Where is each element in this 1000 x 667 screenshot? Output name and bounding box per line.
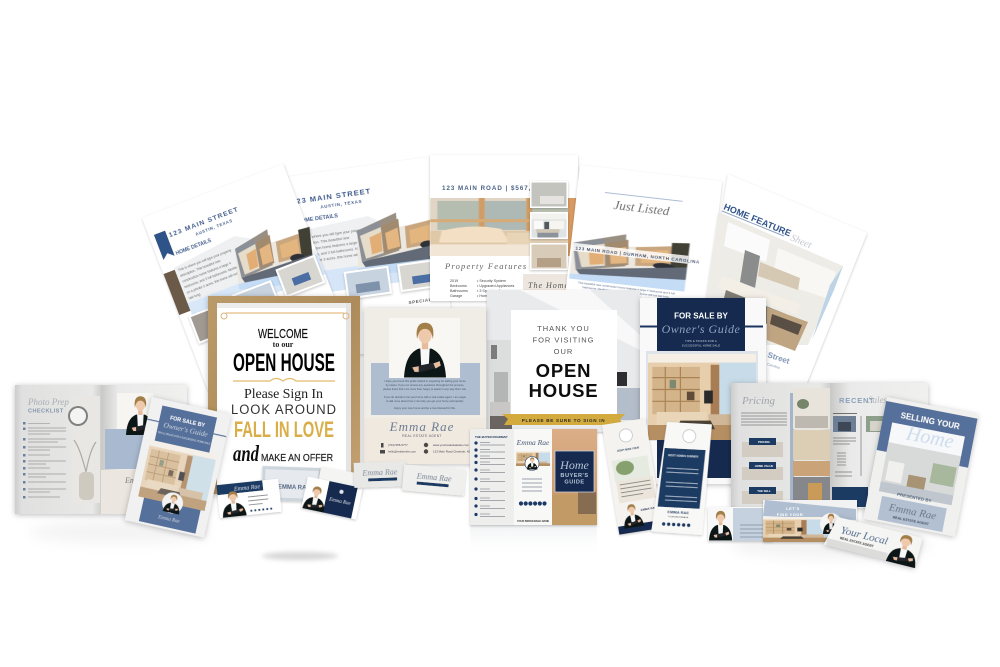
- floor shadow: right kit: [730, 531, 930, 559]
- selling your home booklet: [863, 397, 978, 536]
- card: agent contact: [708, 507, 773, 541]
- feature list left: Bathrooms: [450, 289, 468, 293]
- poster: thank you for visiting: [487, 290, 640, 432]
- cover photo: [552, 429, 597, 525]
- name: EMMA RAE: [640, 505, 657, 512]
- welcome: WELCOME: [258, 326, 308, 341]
- city label: Carolina: [767, 362, 780, 370]
- panel text: [665, 468, 699, 502]
- door hanger: right: [651, 421, 712, 535]
- agent circle: [820, 513, 842, 535]
- thank you: OUR: [554, 347, 573, 356]
- blue text panel: [371, 363, 480, 415]
- kitchen photo: [700, 212, 843, 345]
- photo: [763, 517, 829, 542]
- letter text: by owner. If you run across any questions throughout the process,: [386, 383, 464, 387]
- card: navy agent card: Emma Rae: [328, 497, 352, 507]
- thumbnails: [184, 255, 330, 344]
- portrait: [709, 511, 732, 540]
- card: your local real estate agent: [824, 515, 922, 568]
- business cards: left group: [216, 466, 363, 519]
- room photo: [646, 351, 758, 441]
- card: agent contact: Emma Rae: [233, 484, 261, 493]
- sold photos: [833, 416, 887, 432]
- pricing tiles: HOME VALUE: [755, 464, 773, 468]
- agent portrait: [163, 493, 183, 515]
- dining photo: [767, 307, 808, 351]
- agent portrait: [404, 323, 446, 378]
- buyer's guide reflection: [470, 525, 597, 557]
- card: gray logo card: EMMA RAE: [278, 485, 310, 492]
- feature list left: Garage: [450, 294, 462, 298]
- buyer's guide: [560, 473, 589, 486]
- title: FOR SALE BY: [169, 415, 206, 429]
- buyer's guide: BUYER'S: [560, 473, 589, 479]
- thumbnail photos: [344, 258, 446, 300]
- rule: [640, 326, 763, 328]
- fall in love: FALL IN LOVE: [234, 417, 334, 442]
- subtitle: AUSTIN, TEXAS: [195, 218, 233, 237]
- text box: [616, 476, 656, 503]
- footer: [618, 520, 663, 535]
- feature list right: • Upgraded Appliances: [477, 284, 515, 288]
- social icons: [519, 501, 547, 506]
- lower panel: [139, 498, 201, 534]
- contact details: [388, 443, 471, 454]
- pale wash: [171, 211, 325, 324]
- flyer: home feature sheet: [695, 174, 867, 385]
- hook: [618, 428, 633, 443]
- card: script left: Emma Rae: [361, 467, 398, 478]
- letter text: to talk more about how I can help you get your home sold quickly.: [386, 399, 464, 403]
- description: last long.: [188, 292, 202, 300]
- open house: HOUSE: [529, 380, 598, 401]
- contact icons: [380, 443, 428, 454]
- special features: SPECIAL: [408, 297, 432, 305]
- agent photo box: [389, 318, 460, 378]
- card: back white: [317, 467, 362, 496]
- thank you: THANK YOU: [537, 324, 590, 333]
- agent portrait: [621, 503, 644, 529]
- buyer's guide trifold: [470, 429, 597, 525]
- heading: LET'S: [786, 506, 800, 511]
- title: 123 MAIN STREET: [168, 206, 240, 239]
- feature list right: • Security System: [477, 279, 506, 283]
- checklist open book: [15, 385, 187, 514]
- feature list right: [477, 279, 515, 298]
- name: Emma Rae: [887, 501, 937, 522]
- description: on a private 3 acres, this home will not: [304, 252, 365, 264]
- pricing text: [741, 413, 787, 425]
- for sale by owner booklet front (left): [125, 397, 231, 538]
- roadmap title: THE BUYER ROADMAP: [475, 435, 508, 439]
- tagline: [682, 339, 720, 348]
- for sale by owner guide: [640, 298, 766, 484]
- wood frame: [208, 296, 360, 494]
- name: EMMA RAE: [667, 509, 690, 515]
- checklist heading: CHECKLIST: [28, 408, 64, 414]
- home details heading: HOME DETAILS: [297, 213, 339, 225]
- ornament rule: [233, 378, 335, 381]
- card: agent contact: [216, 479, 282, 518]
- description: This is where you will type your property: [300, 228, 364, 241]
- house photo: [233, 225, 315, 290]
- gold ribbon: [502, 414, 625, 425]
- navy panel: [658, 448, 706, 509]
- property photo: [568, 234, 691, 292]
- feature list left: [450, 279, 468, 298]
- description: [178, 248, 243, 300]
- address text: 123 MAIN ROAD | DURHAM, NORTH CAROLINA: [575, 246, 700, 265]
- tagline: TIPS & TRICKS FOR A: [685, 339, 717, 343]
- navy header: [657, 298, 745, 354]
- description: construction home features a large 4: [302, 240, 360, 252]
- feature list left: Bedrooms: [450, 284, 467, 288]
- and script: and: [233, 441, 259, 466]
- contact details: hello@realtorsite.com: [388, 450, 417, 454]
- letter text: If you do decide to list your home with a real estate agent, I am eager: [384, 395, 466, 399]
- pricing tiles: [742, 438, 783, 504]
- portrait: [823, 514, 839, 534]
- brokerage: YOUR BROKERAGE NAME: [517, 520, 549, 523]
- home details heading: HOME DETAILS: [175, 238, 213, 257]
- header: [155, 405, 217, 453]
- sales script: Sales: [868, 395, 887, 405]
- open house: [529, 360, 598, 401]
- feature list right: • 3 Spacious Areas: [477, 289, 508, 293]
- description: This beautiful new construction home features a large 4 bedrooms and 3 full: [578, 281, 675, 296]
- the home box: [523, 274, 575, 298]
- header: [877, 401, 978, 468]
- flyer: 123 Main Road listing: [430, 155, 578, 301]
- card: navy agent card: [301, 477, 363, 519]
- description: on a private 3 acres, this home will not: [186, 272, 238, 295]
- description: last long.: [304, 264, 319, 270]
- floor shadow: left booklet: [30, 520, 210, 544]
- script: Owner's Guide: [662, 322, 741, 336]
- contact: [522, 479, 542, 491]
- hero photo: [429, 198, 568, 256]
- the home label: The Home: [528, 281, 569, 290]
- right page signature: Emma: [124, 476, 145, 485]
- room photo: [879, 442, 961, 505]
- letter text: please know that I am more than happy to assist in any way that I can.: [383, 387, 467, 391]
- left panel: [470, 429, 514, 525]
- navy footer: [832, 487, 868, 507]
- side rules: [147, 418, 159, 422]
- please sign in: Please Sign In: [244, 387, 323, 402]
- lower band: [826, 538, 888, 560]
- agent circle: [525, 456, 539, 470]
- right page photo and panel: [117, 393, 153, 431]
- mini photo: [516, 451, 550, 466]
- role: REAL ESTATE AGENT: [892, 515, 930, 526]
- agent portrait: [126, 396, 155, 435]
- white inner panel: [884, 422, 965, 478]
- pricing script: Pricing: [741, 395, 775, 407]
- navy cover box: [555, 451, 594, 492]
- title: 123 MAIN STREET: [291, 186, 372, 206]
- heading: DON'T MISS YOUR: [617, 446, 640, 453]
- look around: LOOK AROUND: [231, 402, 337, 417]
- plant photo: [612, 455, 651, 483]
- letter text: [383, 379, 467, 410]
- description: [300, 228, 369, 270]
- contact details: (704) 555-5777: [388, 443, 408, 447]
- heading line 2: FIND YOUR: [777, 512, 803, 517]
- title: FOR SALE BY: [674, 312, 729, 320]
- dark side photo: [164, 270, 190, 315]
- flyer: 123 Main Street (front copy): [142, 163, 352, 392]
- sold details: [833, 416, 861, 476]
- make an offer: MAKE AN OFFER: [261, 452, 333, 464]
- checklist items: [23, 422, 26, 498]
- script: Your Local: [839, 524, 889, 548]
- left page: [15, 385, 101, 514]
- white card: [511, 310, 617, 415]
- flyer: just listed: [566, 165, 722, 308]
- contact lines: [740, 525, 770, 537]
- description: bedrooms, and 3 full bathrooms. Nestled: [303, 245, 367, 258]
- thank you: [532, 324, 595, 356]
- tagline: SUCCESSFUL HOME SALE: [682, 344, 720, 348]
- blue strip: [188, 254, 325, 324]
- title: HOME FEATURE: [722, 202, 793, 238]
- agent portrait: [527, 457, 537, 470]
- letter text: I hope you found this guide helpful in preparing for selling your home: [384, 379, 466, 383]
- presented by: PRESENTED BY: [897, 492, 932, 503]
- description: description. This beautiful new: [180, 259, 222, 278]
- social icons: [662, 522, 690, 527]
- title: SELLING YOUR: [900, 411, 961, 431]
- description: description. This beautiful new: [301, 236, 350, 247]
- house photo: [356, 211, 447, 274]
- to our: to our: [273, 340, 294, 349]
- agent name: Emma Rae: [157, 515, 181, 525]
- feature list left: 2019: [450, 279, 458, 283]
- photo column: [790, 388, 830, 508]
- signature: Emma Rae: [389, 419, 454, 434]
- hook: [682, 429, 696, 443]
- card: gray logo card: [261, 466, 322, 502]
- open house: OPEN HOUSE: [233, 349, 335, 377]
- role: REAL ESTATE AGENT: [839, 536, 874, 548]
- panel heading: MOST HOMES SUMMER: [668, 453, 698, 459]
- left page: [731, 383, 830, 508]
- rule: [605, 192, 683, 202]
- script: Owner's Guide: [163, 420, 209, 439]
- brokerage: YOUR BROKERAGE: [668, 515, 689, 519]
- pricing tiles: PRICING: [758, 440, 770, 444]
- agent circle: [160, 490, 185, 515]
- tagline: TIPS & TRICKS FOR A SUCCESSFUL HOME SALE: [157, 431, 211, 446]
- card: script right: Emma Rae: [415, 471, 452, 484]
- contact details: 123 Main Road Charlotte, NC: [433, 450, 471, 454]
- ribbon text: PLEASE BE SURE TO SIGN IN: [522, 418, 605, 423]
- roadmap steps: [474, 441, 478, 516]
- feature list right: • Home: [477, 294, 489, 298]
- address banner: [572, 243, 688, 264]
- pricing tiles: THE SELL: [757, 489, 771, 493]
- street label: Street: [766, 350, 791, 366]
- business cards: center group: [354, 461, 466, 496]
- letter text: Enjoy your new home and be a true blessed for life.: [394, 406, 456, 410]
- home script: Home: [903, 422, 956, 453]
- recent sales heading: RECENT: [839, 396, 875, 405]
- blue strip: [315, 254, 446, 294]
- top ornament: [226, 313, 344, 485]
- pale wash: [294, 206, 447, 294]
- panel: [733, 508, 773, 541]
- door hanger: left: [602, 418, 663, 535]
- sign board: [217, 303, 351, 486]
- description: bedrooms, and 3 full bathrooms. Nestled: [184, 265, 239, 289]
- room photo: [138, 440, 217, 511]
- buyer's guide: GUIDE: [564, 480, 585, 486]
- role: REAL ESTATE AGENT: [402, 434, 442, 438]
- subtitle: AUSTIN, TEXAS: [320, 199, 362, 210]
- middle panel: [514, 429, 552, 525]
- lower navy panel: [657, 440, 745, 478]
- floor shadow: sign: [262, 552, 338, 560]
- portrait: [886, 532, 922, 568]
- blue name box: [877, 496, 947, 532]
- blue header: [763, 500, 856, 520]
- right page: [830, 383, 928, 508]
- address and price: 123 MAIN ROAD | $567,900: [442, 185, 545, 192]
- description: construction home features a large 4: [182, 261, 232, 284]
- just listed script: Just Listed: [613, 197, 671, 218]
- rule: [722, 211, 784, 236]
- description: This is where you will type your property: [178, 248, 232, 272]
- script heading: Photo Prep: [27, 397, 69, 407]
- description: bathrooms. Nestled on a private 3 acres, this home will not last long.: [582, 285, 670, 299]
- contact details: www.yourrealestatesite.com: [433, 443, 470, 447]
- ribbon icon: [154, 231, 175, 260]
- signature: Emma Rae: [516, 438, 550, 447]
- open house: OPEN: [536, 360, 591, 381]
- open house welcome sign: [208, 296, 360, 494]
- room photo: [487, 290, 640, 432]
- sheet script: Sheet: [789, 233, 813, 251]
- thumbnails: [530, 181, 568, 270]
- card: let's find your home: [763, 500, 857, 542]
- flyer: 123 Main Street (second copy): [272, 156, 463, 363]
- property features heading: Property Features: [444, 261, 527, 271]
- thank you: FOR VISITING: [532, 336, 595, 344]
- pricing and recent sales spread: [731, 383, 928, 508]
- vase photo: [68, 396, 100, 503]
- rule: [833, 412, 857, 415]
- letter from agent: [364, 308, 486, 464]
- right page: [101, 385, 187, 514]
- home script: Home: [559, 458, 589, 472]
